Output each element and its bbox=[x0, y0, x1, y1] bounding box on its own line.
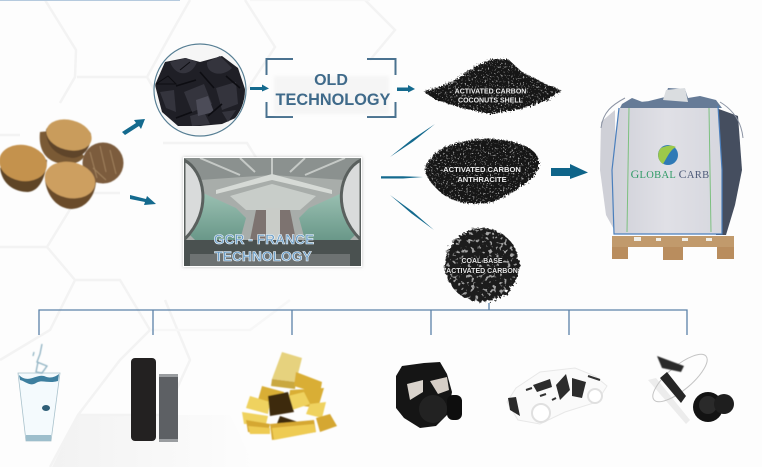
icon: gas mask bbox=[396, 362, 462, 428]
arrow: plant to coal base carbon bbox=[390, 195, 434, 230]
text: technology: TECHNOLOGY bbox=[214, 249, 312, 264]
pile: coal base activated carbon bbox=[445, 228, 519, 302]
bag side bbox=[716, 108, 742, 235]
pile: activated carbon anthracite bbox=[425, 139, 539, 204]
text: technology: TECHNOLOGY bbox=[276, 91, 391, 109]
icon: industrial components bbox=[646, 347, 734, 424]
text: anthracite: ANTHRACITE bbox=[457, 175, 507, 184]
brand name: GLOBAL CARB bbox=[631, 167, 709, 181]
top edge accent line bbox=[0, 0, 180, 1]
icon: car with automotive parts bbox=[507, 368, 607, 424]
old technology label bbox=[266, 59, 396, 117]
arrow: coconut to plant bbox=[130, 195, 156, 205]
icon: glass of water bbox=[18, 344, 60, 441]
arrow: coconut to charcoal bbox=[122, 119, 145, 135]
bulk bag product on pallet bbox=[600, 88, 743, 260]
pallet bbox=[612, 236, 734, 260]
bag top bbox=[620, 88, 722, 108]
text: coal base: COAL BASE bbox=[461, 258, 503, 265]
application connector lines bbox=[39, 303, 687, 335]
text: old: OLD bbox=[314, 72, 348, 89]
pile: activated carbon coconut shell bbox=[424, 59, 561, 114]
icon: gold bars bbox=[242, 352, 337, 440]
arrow: carbon to bulk bag bbox=[551, 164, 588, 179]
text: activated carbon: ACTIVATED CARBON bbox=[446, 268, 518, 275]
panel: GCR France technology photo bbox=[183, 157, 362, 267]
arrow: plant to coconut shell carbon bbox=[390, 124, 435, 157]
arrow: charcoal to old technology bbox=[250, 84, 269, 92]
text: activated carbon: ACTIVATED CARBON bbox=[455, 88, 526, 96]
logo mark bbox=[658, 145, 678, 165]
icon: coconut shells bbox=[0, 115, 124, 209]
arrow: old technology to coconut shell carbon bbox=[397, 85, 415, 92]
bag front bbox=[610, 108, 722, 234]
background hexagon pattern bbox=[0, 0, 395, 467]
charcoal circle bbox=[154, 44, 246, 136]
text: coconuts shell: COCONUTS SHELL bbox=[458, 98, 524, 104]
text: GCR - France: GCR - FRANCE bbox=[214, 232, 314, 247]
text: activated carbon: ACTIVATED CARBON bbox=[443, 165, 521, 174]
icon: carbon filter cartridges bbox=[131, 358, 178, 442]
arrow: plant to anthracite carbon bbox=[381, 176, 423, 178]
